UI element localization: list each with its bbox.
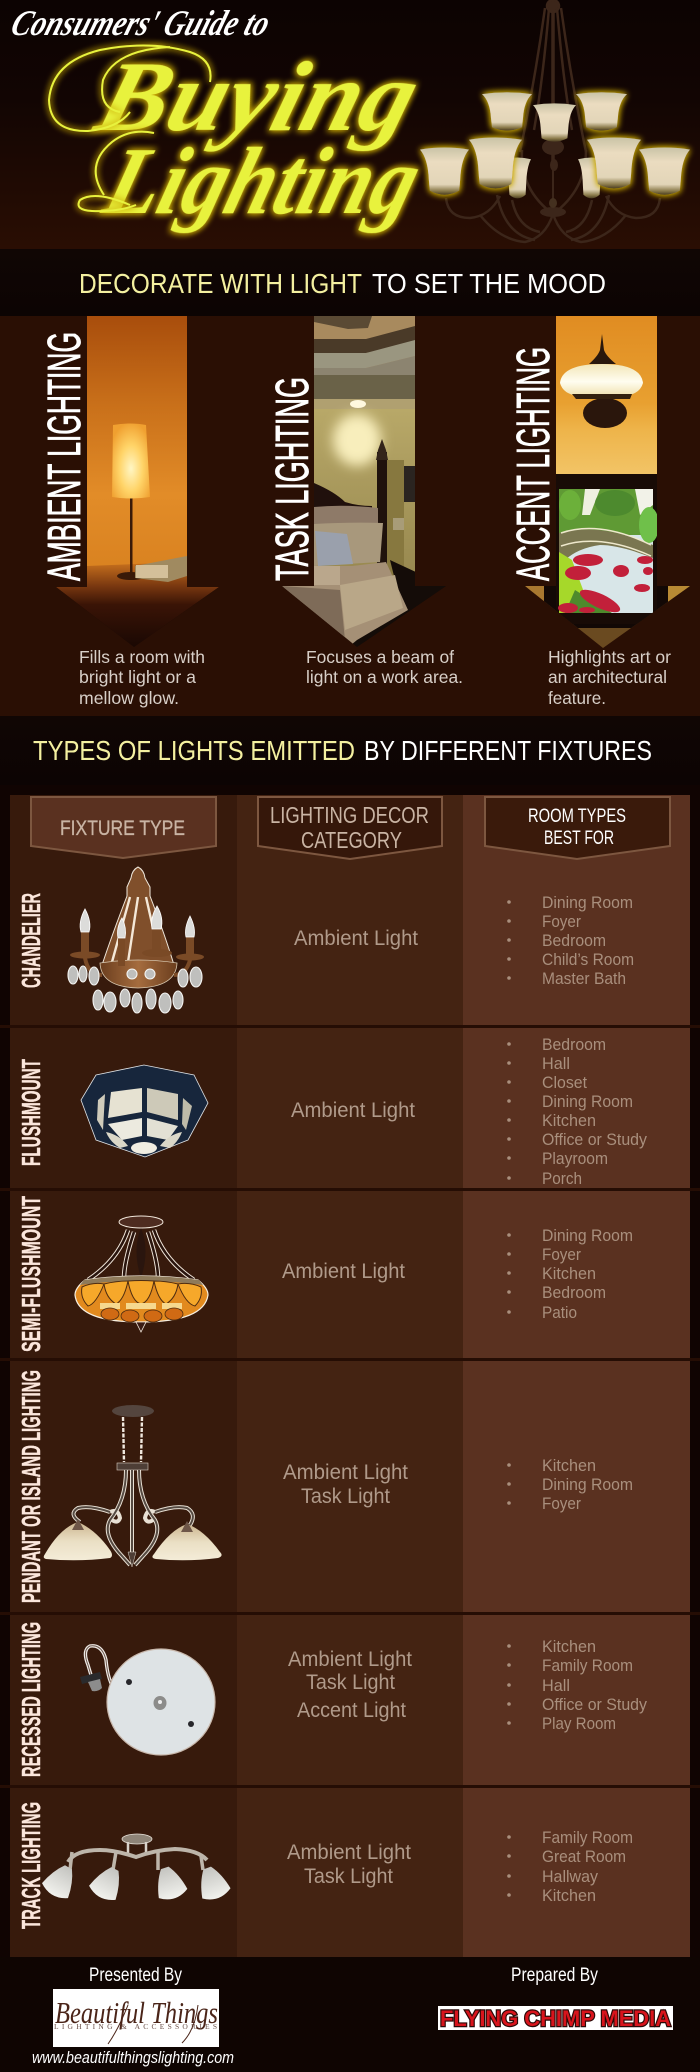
description: accent: Highlights art or — [548, 647, 671, 667]
room list: recessed: Hall — [542, 1676, 570, 1695]
room list: chandelier: Foyer — [542, 912, 581, 931]
credit: prepared by: Prepared By — [511, 1965, 598, 1986]
panel: task lighting — [266, 316, 450, 651]
column header: room types best for: ROOM TYPES — [528, 806, 626, 827]
logo: Flying Chimp Media: FLYING CHIMP MEDIA — [440, 2006, 671, 2031]
category: recessed: Accent Light — [297, 1699, 406, 1722]
room list: semi-flushmount: Bedroom — [542, 1283, 606, 1302]
comparison table — [0, 795, 700, 1957]
chandelier illustration — [420, 0, 690, 242]
column header: fixture type: FIXTURE TYPE — [60, 817, 185, 840]
category: semi-flushmount: Ambient Light — [282, 1260, 405, 1283]
banner: decorate with light — [0, 249, 700, 316]
photo arrow: wall sconce and painting — [520, 316, 695, 650]
description: ambient: Fills a room with — [79, 647, 205, 667]
room list: pendant: Kitchen — [542, 1456, 596, 1475]
category: pendant: Ambient Light — [283, 1461, 408, 1484]
website url: www.beautifulthingslighting.com — [32, 2048, 234, 2067]
chandelier rear shades — [504, 103, 605, 198]
title word: Lighting: Lighting — [93, 129, 432, 235]
row label: chandelier: CHANDELIER — [16, 893, 46, 988]
room list: flushmount: Playroom — [542, 1149, 608, 1168]
category: recessed: Task Light — [306, 1671, 395, 1694]
room list: semi-flushmount: Patio — [542, 1303, 577, 1322]
room list: track: Family Room — [542, 1828, 633, 1847]
description: task: Focuses a beam of — [306, 647, 454, 667]
logo: Beautiful Things — [53, 1989, 219, 2047]
room list: track: Hallway — [542, 1867, 598, 1886]
room list: flushmount: Dining Room — [542, 1092, 633, 1111]
room list: chandelier: Master Bath — [542, 969, 626, 988]
room list: chandelier: Dining Room — [542, 893, 633, 912]
heading: types of lights emitted: TYPES OF LIGHTS EMITTED — [33, 735, 355, 766]
room list: flushmount: Office or Study — [542, 1130, 647, 1149]
row label: semi-flushmount: SEMI-FLUSHMOUNT — [16, 1196, 46, 1352]
room list: recessed: Office or Study — [542, 1695, 647, 1714]
column header: lighting decor category: LIGHTING DECOR — [270, 802, 429, 828]
category: chandelier: Ambient Light — [294, 927, 418, 950]
icon: track fixture — [40, 1834, 232, 1904]
icon: recessed fixture — [80, 1646, 215, 1755]
description: accent — [548, 647, 671, 708]
description: task — [306, 647, 463, 687]
footer — [0, 1957, 700, 2072]
room list: flushmount: Hall — [542, 1054, 570, 1073]
row label: track lighting: TRACK LIGHTING — [16, 1802, 46, 1929]
room list: pendant — [507, 1456, 633, 1513]
room list: semi-flushmount: Kitchen — [542, 1264, 596, 1283]
chandelier glowing shades — [420, 92, 690, 195]
column header: room types best for: BEST FOR — [544, 828, 614, 849]
photo arrow: bedroom — [280, 316, 450, 651]
room list: chandelier: Bedroom — [542, 931, 606, 950]
description: accent: feature. — [548, 688, 606, 708]
description: ambient: bright light or a — [79, 667, 196, 687]
room list: flushmount — [507, 1035, 647, 1188]
description: ambient: mellow glow. — [79, 688, 179, 708]
title — [6, 3, 432, 235]
column header: room types best for — [485, 797, 670, 859]
row label: flushmount: FLUSHMOUNT — [16, 1059, 46, 1166]
outer table background — [0, 785, 700, 2072]
description: ambient — [79, 647, 205, 708]
column header: lighting decor category: CATEGORY — [301, 827, 402, 853]
room list: semi-flushmount: Foyer — [542, 1245, 581, 1264]
photo arrow: table lamp — [50, 316, 225, 651]
category: recessed: Ambient Light — [288, 1648, 412, 1671]
room list: pendant: Dining Room — [542, 1475, 633, 1494]
room list: chandelier — [507, 893, 634, 988]
chandelier frame — [446, 0, 660, 242]
room list: flushmount: Kitchen — [542, 1111, 596, 1130]
row label: recessed lighting: RECESSED LIGHTING — [16, 1622, 46, 1777]
icon: pendant fixture — [44, 1405, 222, 1567]
room list: pendant: Foyer — [542, 1494, 581, 1513]
room list: flushmount: Porch — [542, 1169, 582, 1188]
room list: recessed: Family Room — [542, 1656, 633, 1675]
description: accent: an architectural — [548, 667, 667, 687]
room list: semi-flushmount: Dining Room — [542, 1226, 633, 1245]
category: pendant — [283, 1461, 408, 1508]
room list: chandelier: Child’s Room — [542, 950, 634, 969]
label: task lighting: TASK LIGHTING — [266, 377, 318, 581]
room list: flushmount: Bedroom — [542, 1035, 606, 1054]
icon: semi-flushmount fixture — [75, 1216, 208, 1332]
category: track — [287, 1841, 411, 1888]
logo: Beautiful Things: LIGHTING & ACCESSORIES — [54, 2022, 217, 2031]
credit: presented by: Presented By — [89, 1965, 182, 1986]
room list: recessed — [507, 1637, 647, 1733]
room list: flushmount: Closet — [542, 1073, 587, 1092]
panel: accent lighting — [507, 316, 695, 650]
label: ambient lighting: AMBIENT LIGHTING — [38, 332, 90, 581]
label: accent lighting: ACCENT LIGHTING — [507, 347, 559, 581]
heading: to set the mood: TO SET THE MOOD — [372, 268, 606, 299]
room list: track: Great Room — [542, 1847, 626, 1866]
logo: Beautiful Things: Beautiful Things — [55, 1995, 218, 2030]
heading: decorate with light: DECORATE WITH LIGHT — [79, 268, 362, 299]
category: recessed — [288, 1648, 412, 1722]
description: task: light on a work area. — [306, 667, 463, 687]
icon: flushmount fixture — [81, 1065, 208, 1157]
column header: lighting decor category — [258, 797, 442, 859]
category: flushmount: Ambient Light — [291, 1099, 415, 1122]
room list: semi-flushmount — [507, 1226, 633, 1322]
header background — [0, 0, 700, 249]
category: pendant: Task Light — [301, 1485, 390, 1508]
banner: types of lights — [0, 716, 700, 785]
row separators — [0, 1025, 700, 1788]
section background — [0, 316, 700, 716]
icon: chandelier fixture — [68, 867, 204, 1013]
room list: track: Kitchen — [542, 1886, 596, 1905]
column backgrounds — [10, 795, 690, 1957]
title word: Buying: Buying — [85, 42, 431, 153]
category: track: Ambient Light — [287, 1841, 411, 1864]
room list: recessed: Kitchen — [542, 1637, 596, 1656]
title flourishes — [49, 45, 211, 211]
title line: Consumers' Guide to: Consumers' Guide to — [6, 3, 275, 43]
room list: recessed: Play Room — [542, 1714, 616, 1733]
panel: ambient lighting — [38, 316, 225, 651]
column header: fixture type — [31, 797, 216, 858]
category: track: Task Light — [304, 1865, 393, 1888]
row label: pendant or island lighting: PENDANT OR ISLAND LIGHTING — [16, 1370, 46, 1603]
room list: track — [507, 1828, 633, 1905]
